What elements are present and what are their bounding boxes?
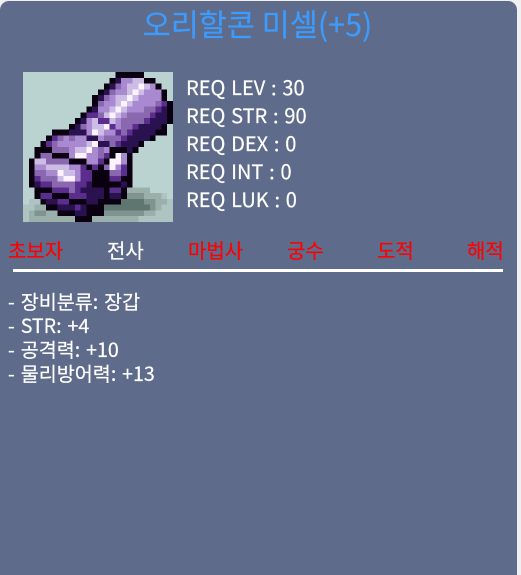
job class row: 마법사 <box>188 235 243 264</box>
job class row: 전사 <box>107 235 144 264</box>
text block: requirements: REQ STR : 90 <box>186 100 307 129</box>
job class row: 초보자 <box>8 235 63 264</box>
text block: item stats: - STR: +4 <box>8 310 89 339</box>
job class row: 도적 <box>377 235 414 264</box>
text block: item stats: - 공격력: +10 <box>8 334 119 363</box>
job class row <box>8 235 504 264</box>
text block: requirements: REQ LUK : 0 <box>186 184 297 213</box>
text block: requirements: REQ LEV : 30 <box>186 72 305 101</box>
text block: item stats: - 물리방어력: +13 <box>8 358 155 387</box>
text block: item stats <box>8 286 155 387</box>
text block: requirements: REQ DEX : 0 <box>186 128 296 157</box>
icon: purple gauntlet pixel art <box>23 72 173 222</box>
text block: requirements <box>186 72 307 213</box>
text block: requirements: REQ INT : 0 <box>186 156 292 185</box>
job class row: 궁수 <box>287 235 324 264</box>
job class row: 해적 <box>467 235 504 264</box>
text block: item stats: - 장비분류: 장갑 <box>8 286 140 315</box>
title: item name: 오리할콘 미셀(+5) <box>143 1 372 45</box>
